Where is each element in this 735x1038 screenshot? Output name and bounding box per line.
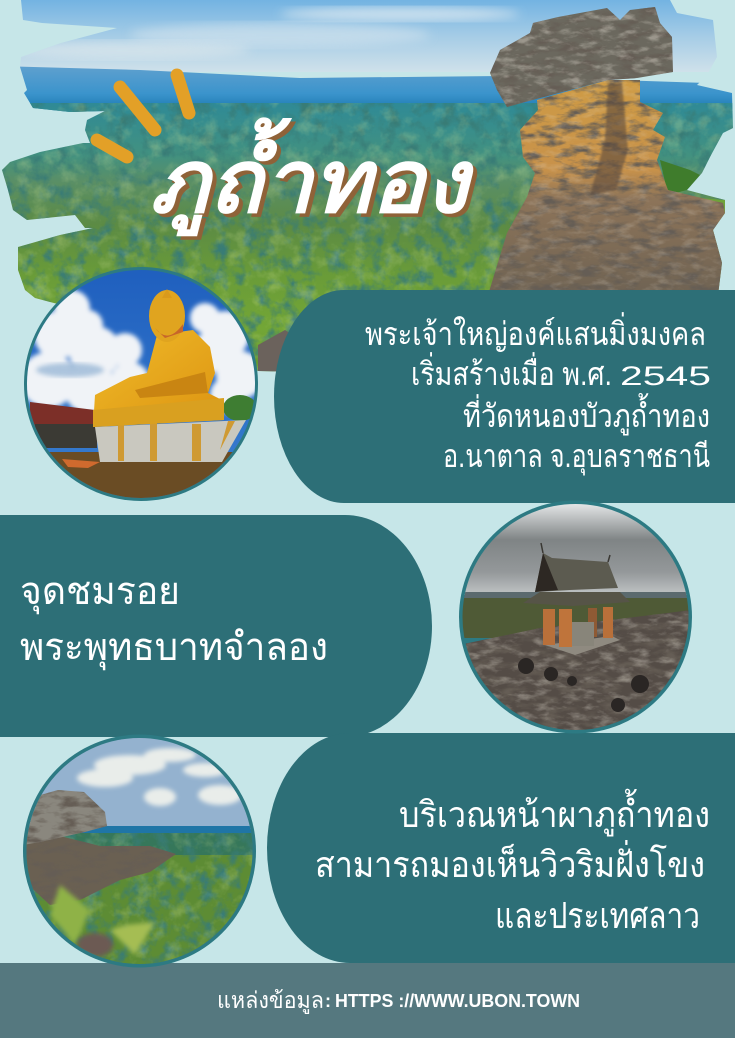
panel: footprint viewpoint: [0, 515, 432, 737]
source text: [217, 987, 580, 1014]
accent dashes: [97, 75, 189, 157]
panel text: พระพุทธบาทจำลอง: [20, 626, 328, 671]
panel text: 2545: [620, 361, 711, 391]
panel text: จุดชมรอย: [20, 570, 180, 615]
title: ภูถ้ำทอง: [154, 120, 478, 240]
tree and grass ledge by rock: [660, 160, 700, 195]
source text: แหล่งข้อมูล: [217, 987, 324, 1014]
panel text: [365, 312, 711, 476]
panel text: [315, 788, 710, 936]
hero landscape photo: [0, 0, 735, 393]
panel: Buddha statue: [274, 290, 735, 503]
title: ภูถ้ำทอง: [150, 117, 474, 237]
photo circle: cliff overlooking forest: [23, 734, 257, 968]
title: [150, 117, 478, 240]
rock fragment by panel: [258, 330, 288, 372]
photo circle: shrine on rock plateau: [459, 500, 693, 735]
panel text: เริ่มสร้างเมื่อ พ.ศ.: [411, 352, 612, 392]
balancing rock pillar: [488, 7, 725, 295]
panel text: [20, 570, 328, 671]
photo circle: golden Buddha: [20, 267, 264, 502]
footer: [0, 963, 735, 1038]
panel: cliff view: [267, 733, 735, 963]
source text: :: [325, 991, 331, 1011]
source text: HTTPS ://WWW.UBON.TOWN: [335, 991, 580, 1011]
